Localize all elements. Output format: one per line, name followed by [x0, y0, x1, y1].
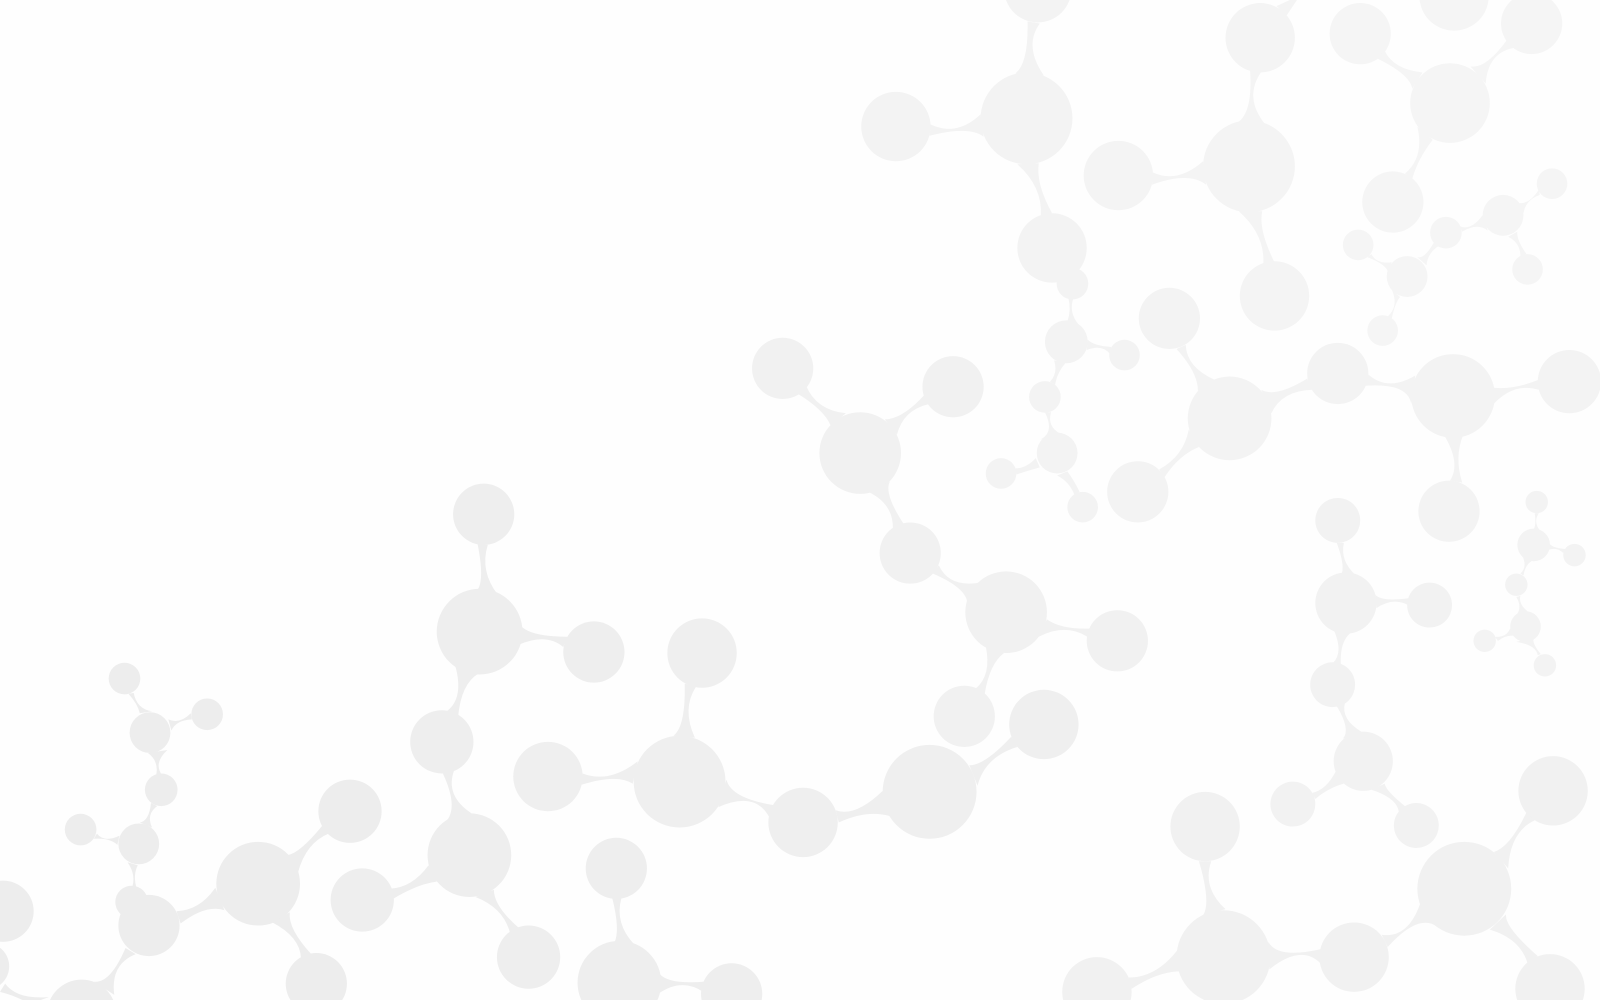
molecule: small far right chain: [1473, 491, 1586, 677]
molecule: lower middle chain: [331, 484, 624, 989]
molecule: small top right chain: [1343, 168, 1567, 346]
molecule: top centre chain with small branch: [861, 0, 1140, 522]
molecule: bottom left chain: [0, 663, 382, 1000]
molecule: right lower chain: [1270, 498, 1452, 848]
molecule: upper right chain: [1084, 0, 1309, 331]
molecule: right middle chain: [1107, 288, 1600, 542]
molecule: lower central chain: [513, 618, 1079, 857]
molecule: top right chain: [1330, 0, 1562, 233]
molecule: bottom middle chain: [578, 838, 762, 1000]
molecule: central chain: [752, 338, 1148, 747]
molecule: bottom right chain: [1062, 756, 1588, 1000]
